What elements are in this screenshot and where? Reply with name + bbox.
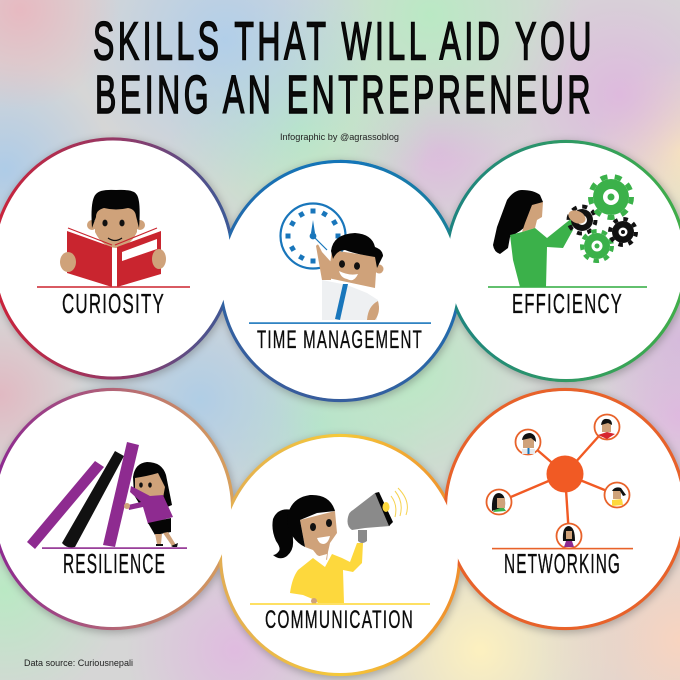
icon: man reading red book (60, 190, 166, 287)
node: man in shirt (516, 430, 540, 454)
rule (492, 548, 633, 549)
rule (42, 547, 187, 549)
rule (37, 286, 190, 288)
node: woman in purple (556, 524, 582, 548)
panel: curiosity (37, 190, 190, 319)
rule (249, 322, 431, 324)
panel: communication (250, 488, 430, 634)
panel: resilience (27, 442, 187, 579)
icon: woman holding falling books (27, 442, 178, 549)
node: woman in yellow (604, 482, 630, 508)
panel: efficiency (488, 176, 647, 319)
label: RESILIENCE (63, 548, 166, 579)
rule (488, 286, 647, 288)
circle shadows (0, 138, 680, 679)
label: CURIOSITY (62, 288, 165, 319)
white circle fills (0, 140, 680, 673)
icon: woman with megaphone (272, 488, 407, 604)
node: woman in green (486, 490, 512, 514)
title (93, 12, 595, 125)
data source note: Data source: Curiousnepali (24, 658, 133, 669)
label: TIME MANAGEMENT (257, 326, 423, 354)
label: COMMUNICATION (265, 606, 414, 634)
icon: woman turning gears (493, 176, 636, 287)
panel: time management (249, 204, 431, 354)
node: man in red (594, 414, 620, 440)
rule (250, 603, 430, 605)
credit line: Infographic by @agrassoblog (280, 132, 399, 143)
icon: clock and pointing man (280, 204, 384, 320)
icon: network of people (486, 414, 630, 548)
circle outlines (0, 139, 680, 674)
panel: networking (486, 414, 633, 579)
